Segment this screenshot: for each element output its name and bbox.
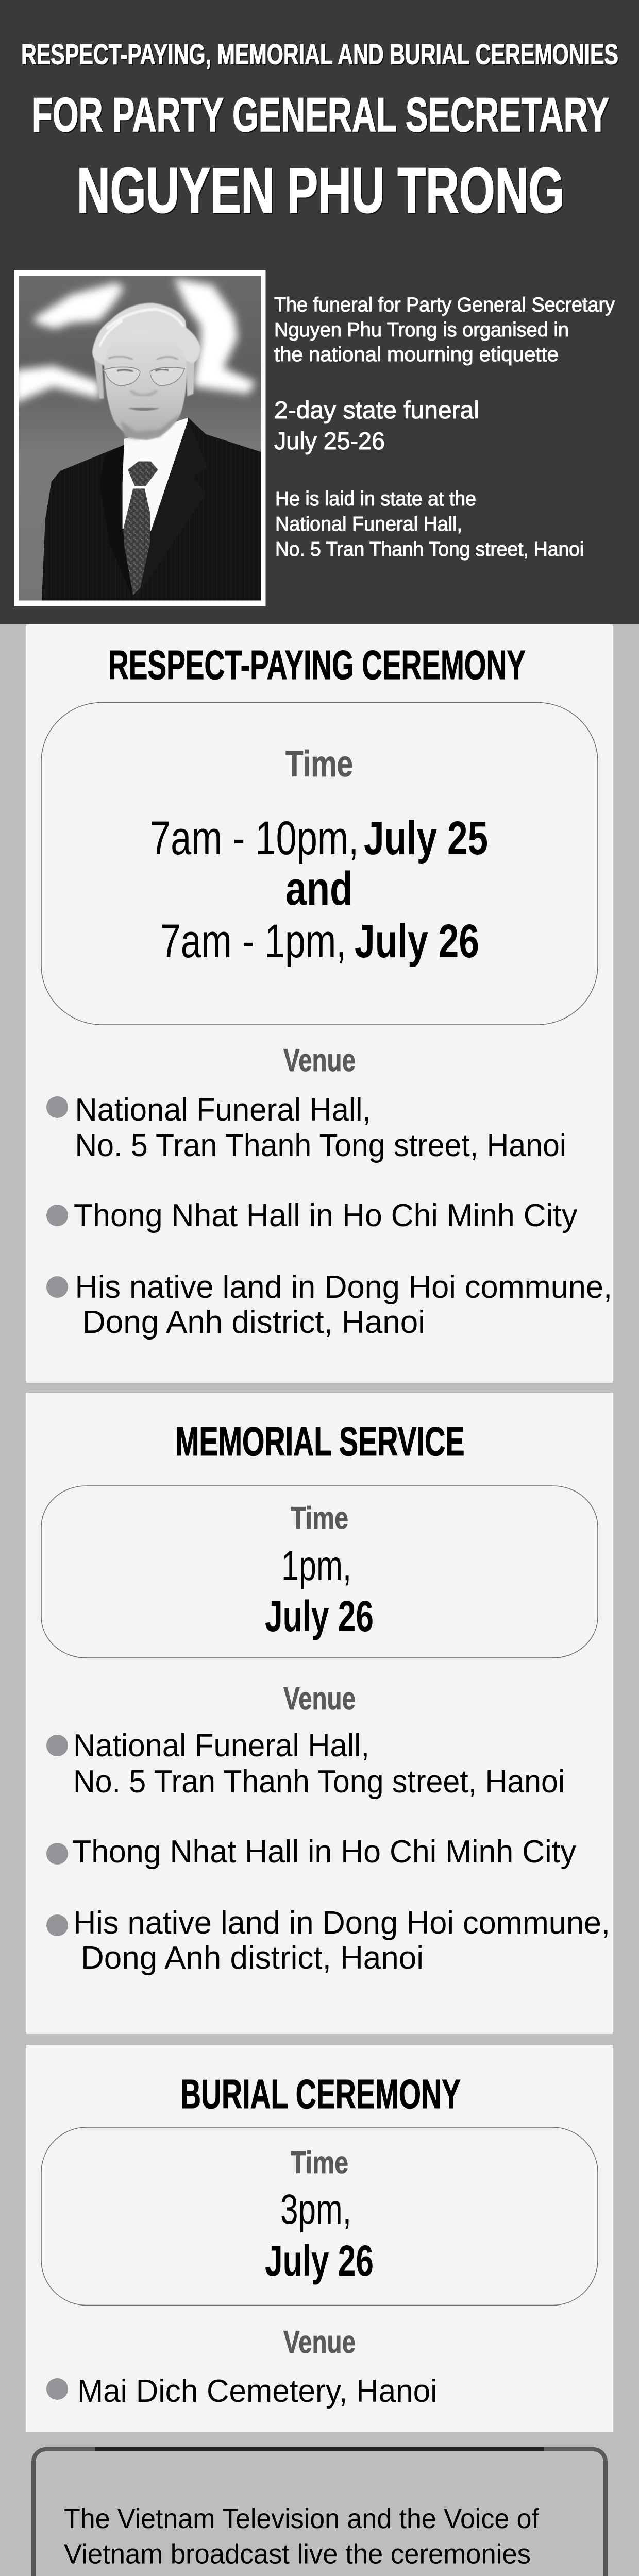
time box bbox=[41, 2127, 598, 2305]
venue label: Venue bbox=[283, 1043, 356, 1078]
venue list: Thong Nhat Hall in Ho Chi Minh City bbox=[74, 1198, 577, 1233]
time box: July 26 bbox=[355, 915, 479, 968]
panel: respect-paying ceremony bbox=[26, 624, 613, 1383]
time box: 1pm, bbox=[281, 1543, 351, 1589]
venue label: Venue bbox=[283, 1681, 356, 1717]
intro text: July 25-26 bbox=[274, 427, 385, 454]
venue list: Thong Nhat Hall in Ho Chi Minh City bbox=[72, 1834, 576, 1870]
intro text: National Funeral Hall, bbox=[275, 513, 462, 535]
intro text: No. 5 Tran Thanh Tong street, Hanoi bbox=[275, 538, 584, 561]
time box: July 26 bbox=[265, 1592, 374, 1640]
panel: burial ceremony bbox=[26, 2045, 613, 2432]
venue list: Dong Anh district, Hanoi bbox=[82, 1304, 425, 1340]
intro text: He is laid in state at the bbox=[275, 488, 476, 510]
portrait photo bbox=[14, 270, 266, 606]
venue list: National Funeral Hall, bbox=[73, 1728, 369, 1764]
time box: 7am - 10pm, bbox=[150, 812, 359, 865]
callout: broadcast: The Vietnam Television and the Voice of bbox=[64, 2503, 540, 2534]
intro text: the national mourning etiquette bbox=[274, 344, 559, 366]
time box: 7am - 1pm, bbox=[160, 915, 346, 968]
time box: and bbox=[285, 862, 353, 915]
venue list: His native land in Dong Hoi commune, bbox=[75, 1269, 612, 1305]
venue list: National Funeral Hall, bbox=[75, 1092, 371, 1128]
panel: header bbox=[0, 0, 639, 624]
time box: Time bbox=[285, 744, 353, 785]
venue list: His native land in Dong Hoi commune, bbox=[73, 1905, 610, 1941]
intro text: Nguyen Phu Trong is organised in bbox=[274, 319, 569, 341]
title bbox=[21, 38, 618, 227]
time box bbox=[41, 1486, 598, 1658]
time box: Time bbox=[291, 2145, 348, 2180]
heading: MEMORIAL SERVICE bbox=[175, 1418, 465, 1464]
time box: Time bbox=[291, 1501, 348, 1535]
venue list: No. 5 Tran Thanh Tong street, Hanoi bbox=[73, 1764, 565, 1800]
callout: broadcast bbox=[33, 2447, 606, 2576]
time box: July 26 bbox=[265, 2236, 374, 2285]
venue list: Mai Dich Cemetery, Hanoi bbox=[77, 2374, 437, 2409]
venue list: Dong Anh district, Hanoi bbox=[81, 1940, 424, 1976]
venue list bbox=[46, 1728, 610, 1976]
intro text: 2-day state funeral bbox=[274, 396, 479, 423]
intro text: The funeral for Party General Secretary bbox=[274, 294, 615, 316]
venue label: Venue bbox=[283, 2325, 356, 2360]
panel: memorial service bbox=[26, 1393, 613, 2034]
time box: 3pm, bbox=[280, 2186, 351, 2233]
venue list bbox=[46, 1092, 612, 1340]
time box: July 25 bbox=[364, 812, 488, 865]
venue list: No. 5 Tran Thanh Tong street, Hanoi bbox=[75, 1128, 566, 1163]
heading: BURIAL CEREMONY bbox=[180, 2071, 461, 2117]
intro text bbox=[274, 294, 615, 561]
time box bbox=[41, 703, 598, 1025]
callout: broadcast: Vietnam broadcast live the ceremonies bbox=[64, 2539, 531, 2570]
